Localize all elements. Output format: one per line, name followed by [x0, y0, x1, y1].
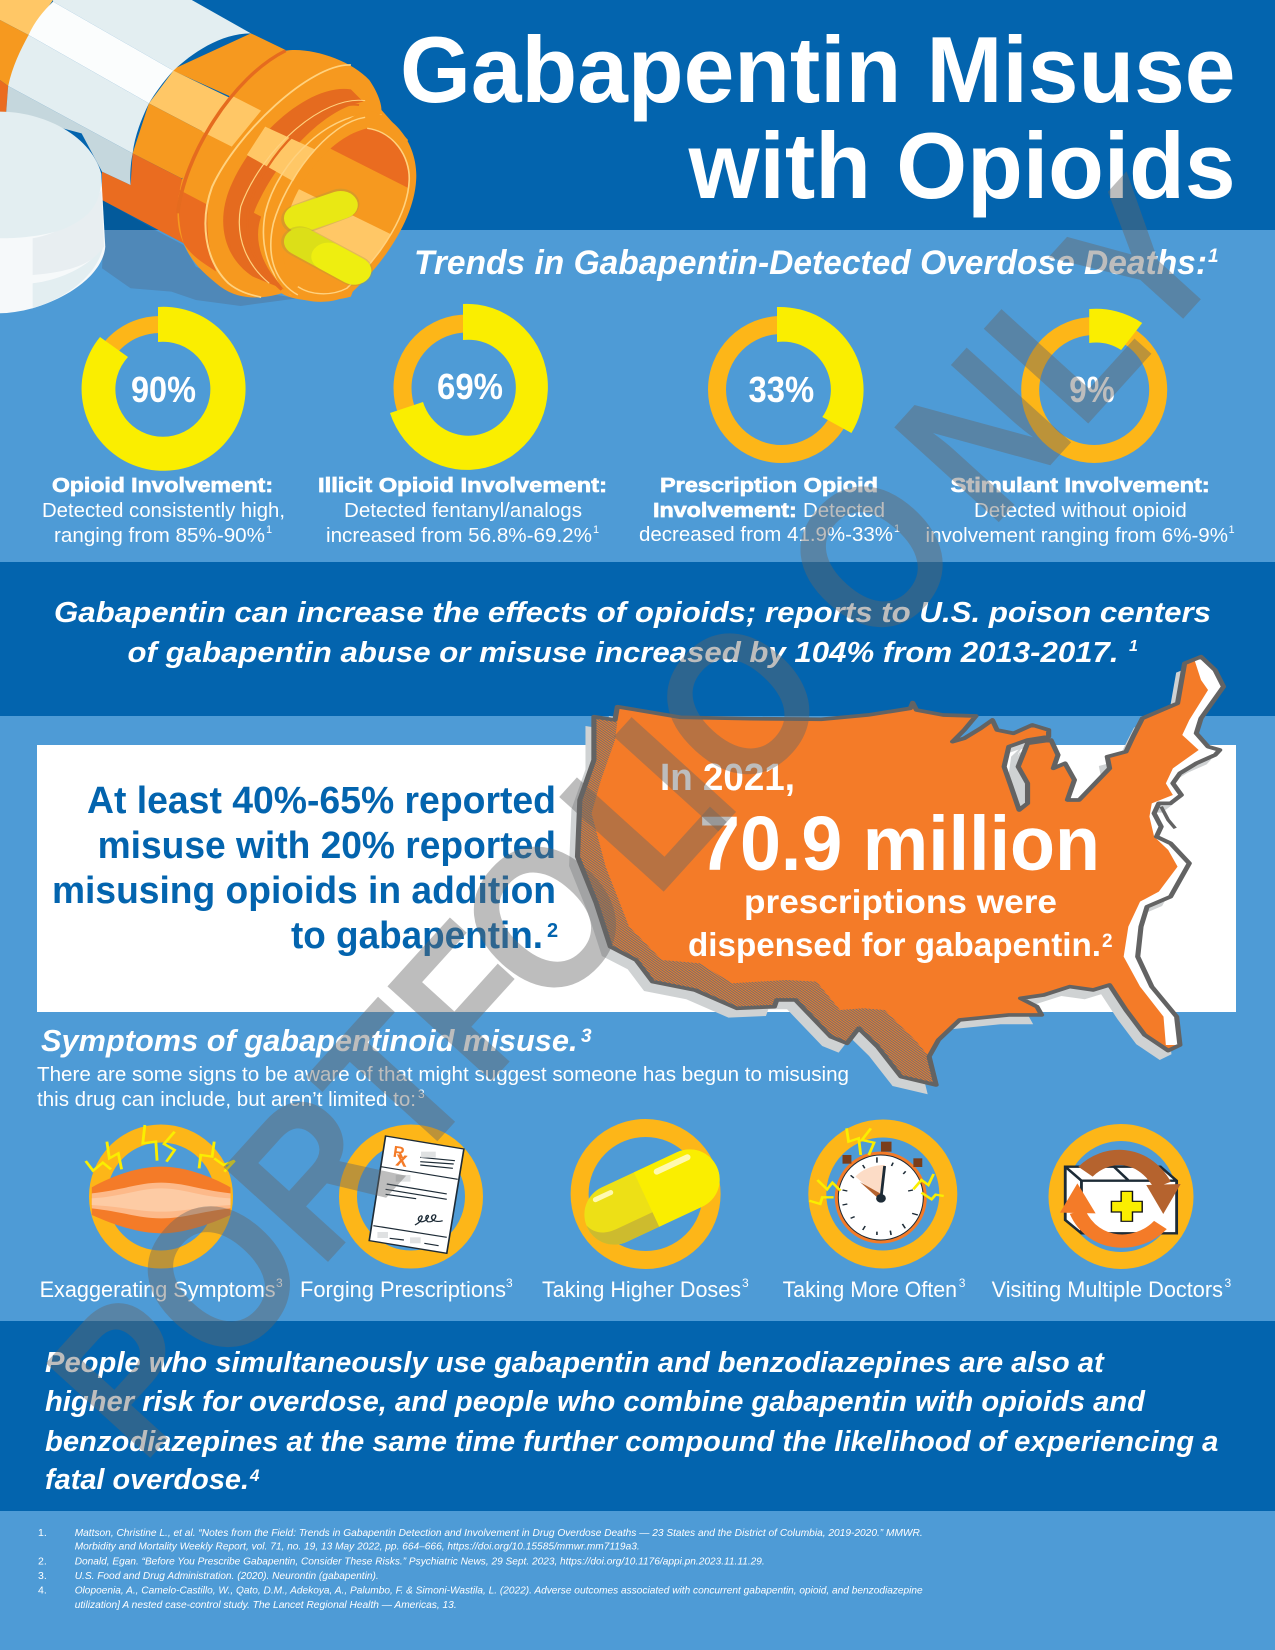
- capsules in bottle: [300, 204, 354, 271]
- callout: reported misuse: to gabapentin.: [291, 915, 543, 957]
- text: prescription opioid involvement: [639, 475, 900, 546]
- text: symptoms intro: 3: [418, 1087, 425, 1101]
- callout: benzodiazepine risk: fatal overdose.: [45, 1464, 249, 1496]
- map: contiguous United States: [569, 657, 1224, 1094]
- band: benzodiazepines background: [0, 1321, 1275, 1511]
- mouth rim: [272, 110, 416, 302]
- donut: stimulant involvement 9%: 9%: [1069, 369, 1115, 410]
- title: with Opioids: [688, 113, 1236, 218]
- illustration: spilled pill bottle: [0, 0, 416, 313]
- text: stimulant involvement: Stimulant Involvement:: [951, 475, 1210, 497]
- band: opioid effects background: [0, 562, 1275, 716]
- references: U.S. Food and Drug Administration. (2020). Neurontin (gabapentin).: [75, 1570, 379, 1582]
- section heading: trends: Trends in Gabapentin-Detected Overdose Deaths:: [414, 244, 1207, 282]
- label: taking more often: 3: [959, 1276, 966, 1290]
- label: exaggerating symptoms: Exaggerating Symptoms: [40, 1277, 276, 1302]
- text: prescription opioid involvement: decreased from 41.9%-33%: [639, 524, 893, 546]
- label: taking higher doses: 3: [742, 1276, 749, 1290]
- references: 4.: [38, 1584, 47, 1596]
- text: symptoms intro: [37, 1064, 849, 1111]
- text: illicit opioid involvement: [318, 475, 607, 547]
- references: Morbidity and Mortality Weekly Report, vol. 71, no. 19, 13 May 2022, pp. 664–666, https://doi.org/10.15585/mmwr.mm7119a3.: [75, 1540, 640, 1552]
- text: opioid involvement: 1: [266, 524, 272, 536]
- map callout: prescriptions dispensed: prescriptions were: [744, 883, 1057, 920]
- donut: opioid involvement 90%: [82, 307, 246, 471]
- text: stimulant involvement: [926, 475, 1235, 547]
- references: 1.: [38, 1527, 47, 1539]
- white panel: [37, 745, 1236, 1012]
- icon: capsule: [575, 1128, 729, 1260]
- text: illicit opioid involvement: Illicit Opioid Involvement:: [318, 475, 607, 497]
- map callout: prescriptions dispensed: dispensed for gabapentin.: [688, 926, 1101, 963]
- text: opioid involvement: Detected consistently high,: [42, 500, 285, 522]
- map callout: prescriptions dispensed: 70.9 million: [699, 801, 1100, 887]
- references: 2.: [38, 1556, 47, 1568]
- text: stimulant involvement: 1: [1228, 524, 1235, 536]
- text: prescription opioid involvement: Detected: [803, 500, 885, 522]
- text: stimulant involvement: Detected without opioid: [974, 500, 1187, 522]
- icon: forged prescription: x: [394, 1147, 409, 1172]
- header band: [0, 0, 1275, 230]
- text: opioid involvement: Opioid Involvement:: [52, 475, 273, 497]
- label: visiting multiple doctors: Visiting Multiple Doctors: [992, 1277, 1223, 1302]
- references: Mattson, Christine L., et al. “Notes from the Field: Trends in Gabapentin Detection and Involvement in Drug Overdose Deaths — 23 States and the District of Columbia, 2019-2020.” MMWR.: [75, 1527, 923, 1539]
- callout: benzodiazepine risk: 4: [249, 1466, 260, 1485]
- donut: opioid involvement 90%: 90%: [131, 369, 196, 410]
- references: Olopoenia, A., Camelo-Castillo, W., Qato, D.M., Adekoya, A., Palumbo, F. & Simoni-Wastila, L. (2022). Adverse outcomes associated with concurrent gabapentin, opioid, and benzodiazepine: [75, 1584, 923, 1596]
- icon: forged prescription: R: [392, 1144, 406, 1162]
- icon: medical box with cycling arrows: [1057, 1132, 1185, 1260]
- icon: forged prescription: [348, 1134, 474, 1260]
- section heading: symptoms: 3: [581, 1026, 592, 1047]
- callout: poison center reports: Gabapentin can increase the effects of opioids; reports to U.S. poison centers: [54, 597, 1211, 629]
- references: Donald, Egan. “Before You Prescribe Gabapentin, Consider These Risks.” Psychiatric News, 29 Sept. 2023, https://doi.org/10.1176/appi.pn.2023.11.11.29.: [75, 1556, 765, 1568]
- callout: poison center reports: 1: [1129, 638, 1138, 655]
- callout: benzodiazepine risk: benzodiazepines at the same time further compound the likelihood of experiencing a: [45, 1426, 1218, 1458]
- references: [38, 1527, 923, 1611]
- label: visiting multiple doctors: 3: [1224, 1276, 1232, 1290]
- donut: illicit opioid involvement 69%: 69%: [437, 366, 503, 407]
- threads: [223, 89, 363, 277]
- title: [400, 17, 1236, 218]
- map callout: prescriptions dispensed: 2: [1102, 931, 1113, 952]
- callout: reported misuse: At least 40%-65% reported: [87, 780, 556, 822]
- text: symptoms intro: this drug can include, but aren’t limited to:: [37, 1089, 416, 1111]
- map callout: prescriptions dispensed: [660, 757, 1113, 963]
- label: taking more often: Taking More Often: [783, 1277, 957, 1302]
- callout: poison center reports: of gabapentin abuse or misuse increased by 104% from 2013-2017.: [128, 637, 1118, 669]
- text: prescription opioid involvement: Prescription Opioid: [660, 475, 878, 497]
- text: prescription opioid involvement: Involvement:: [653, 500, 797, 522]
- section heading: trends: 1: [1208, 246, 1219, 267]
- text: illicit opioid involvement: increased from 56.8%-69.2%: [326, 525, 592, 547]
- label: taking higher doses: Taking Higher Doses: [542, 1277, 741, 1302]
- donut: prescription opioid involvement 33%: [717, 307, 864, 454]
- callout: reported misuse: 2: [547, 920, 558, 942]
- label: forging prescriptions: 3: [506, 1276, 513, 1290]
- neck flange: [177, 50, 408, 301]
- map callout: prescriptions dispensed: In 2021,: [660, 757, 795, 799]
- label: exaggerating symptoms: 3: [276, 1276, 283, 1290]
- text: prescription opioid involvement: 1: [894, 523, 900, 535]
- callout: benzodiazepine risk: higher risk for overdose, and people who combine gabapentin with opioids and: [45, 1386, 1146, 1418]
- text: stimulant involvement: involvement ranging from 6%-9%: [926, 525, 1228, 547]
- title: Gabapentin Misuse: [400, 17, 1236, 122]
- text: opioid involvement: ranging from 85%-90%: [54, 525, 265, 547]
- text: illicit opioid involvement: Detected fentanyl/analogs: [344, 500, 582, 522]
- callout: reported misuse: [52, 780, 558, 957]
- text: symptoms intro: There are some signs to be aware of that might suggest someone has begun to misusing: [37, 1064, 849, 1086]
- callout: poison center reports: [54, 597, 1211, 669]
- text: opioid involvement: [42, 475, 285, 547]
- donut: stimulant involvement 9%: [1030, 309, 1158, 454]
- icon: stopwatch: [809, 1128, 948, 1260]
- text: illicit opioid involvement: 1: [593, 524, 599, 536]
- bottle cap: [0, 112, 105, 313]
- references: 3.: [38, 1570, 47, 1582]
- section heading: symptoms: Symptoms of gabapentinoid misuse.: [41, 1023, 578, 1058]
- callout: benzodiazepine risk: [45, 1347, 1218, 1496]
- references: utilization] A nested case-control study. The Lancet Regional Health — Americas, 13.: [75, 1599, 457, 1611]
- donut: illicit opioid involvement 69%: [390, 304, 548, 470]
- icon: exaggerating symptoms: [86, 1125, 235, 1260]
- label: forging prescriptions: Forging Prescriptions: [300, 1277, 506, 1302]
- donut: prescription opioid involvement 33%: 33%: [748, 369, 814, 410]
- callout: reported misuse: misusing opioids in addition: [52, 870, 556, 912]
- callout: reported misuse: misuse with 20% reported: [98, 825, 556, 867]
- watermark: portfolio only: PORTFOLIO ONLY: [5, 140, 1266, 1497]
- callout: benzodiazepine risk: People who simultaneously use gabapentin and benzodiazepines are also at: [45, 1347, 1105, 1379]
